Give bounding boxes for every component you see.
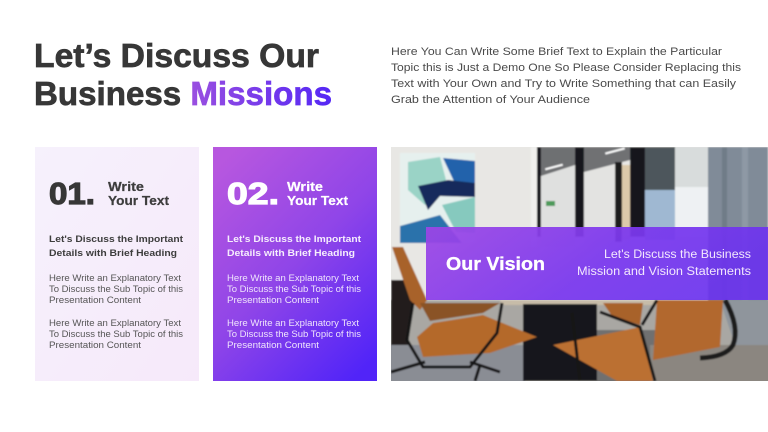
banner heading: Our Vision <box>446 254 545 274</box>
card 01 explanatory text 2 <box>49 318 184 350</box>
card 01 title: Your Text <box>108 194 170 208</box>
table top <box>500 300 660 305</box>
card 01 explanatory text 2: To Discuss the Sub Topic of this <box>49 329 184 339</box>
card 02 explanatory text 2: To Discuss the Sub Topic of this <box>227 329 362 339</box>
card 02 heading: Let's Discuss the Important <box>227 234 362 245</box>
title: Let’s Discuss Our <box>34 37 319 74</box>
far seat right <box>603 303 643 325</box>
card 02 explanatory text 1: Presentation Content <box>227 295 320 305</box>
number 02: 02. <box>227 176 279 211</box>
banner statement <box>577 249 751 278</box>
intro text block: Here You Can Write Some Brief Text to Explain the Particular <box>391 46 722 58</box>
intro text block: Grab the Attention of Your Audience <box>391 94 590 106</box>
card 01 explanatory text 1: Here Write an Explanatory Text <box>49 273 182 283</box>
card 02 explanatory text 2: Here Write an Explanatory Text <box>227 318 360 328</box>
card 01 explanatory text 2: Here Write an Explanatory Text <box>49 318 182 328</box>
intro text block: Text with Your Own and Try to Write Something that can Easily <box>391 78 737 90</box>
card 01 explanatory text 1: To Discuss the Sub Topic of this <box>49 284 184 294</box>
card 02 title: Your Text <box>287 194 349 208</box>
far seat left <box>391 280 413 345</box>
card 02 heading <box>227 234 362 259</box>
card 01 explanatory text 2: Presentation Content <box>49 340 142 350</box>
banner: our vision <box>426 227 768 300</box>
photo: meeting room <box>385 140 768 390</box>
number 01: 01. <box>49 176 95 211</box>
floor <box>391 300 734 381</box>
right chair <box>653 300 723 360</box>
banner statement: Let's Discuss the Business <box>604 249 751 261</box>
card 02 explanatory text 2 <box>227 318 362 350</box>
card 02 explanatory text 1: To Discuss the Sub Topic of this <box>227 284 362 294</box>
near left chair <box>417 315 537 357</box>
card 01 heading <box>49 234 184 259</box>
card 02 title: Write <box>287 180 323 194</box>
card 01 heading: Let's Discuss the Important <box>49 234 184 245</box>
title: Business Missions <box>34 75 332 112</box>
intro text block <box>391 46 742 106</box>
card 02 heading: Details with Brief Heading <box>227 248 355 259</box>
card 02 explanatory text 2: Presentation Content <box>227 340 320 350</box>
intro text block: Topic this is Just a Demo One So Please Consider Replacing this <box>391 62 742 74</box>
title <box>34 37 332 112</box>
card 01 explanatory text 1 <box>49 273 184 305</box>
artwork <box>400 153 475 243</box>
card 01 explanatory text 1: Presentation Content <box>49 295 142 305</box>
card 01 title: Write <box>108 180 144 194</box>
card 01 title <box>108 180 170 208</box>
panel: card 01 <box>35 147 199 381</box>
panel: card 02 <box>213 147 377 381</box>
card 02 explanatory text 1 <box>227 273 362 305</box>
banner statement: Mission and Vision Statements <box>577 266 751 278</box>
card 02 title <box>287 180 349 208</box>
card 01 heading: Details with Brief Heading <box>49 248 177 259</box>
card 02 explanatory text 1: Here Write an Explanatory Text <box>227 273 360 283</box>
